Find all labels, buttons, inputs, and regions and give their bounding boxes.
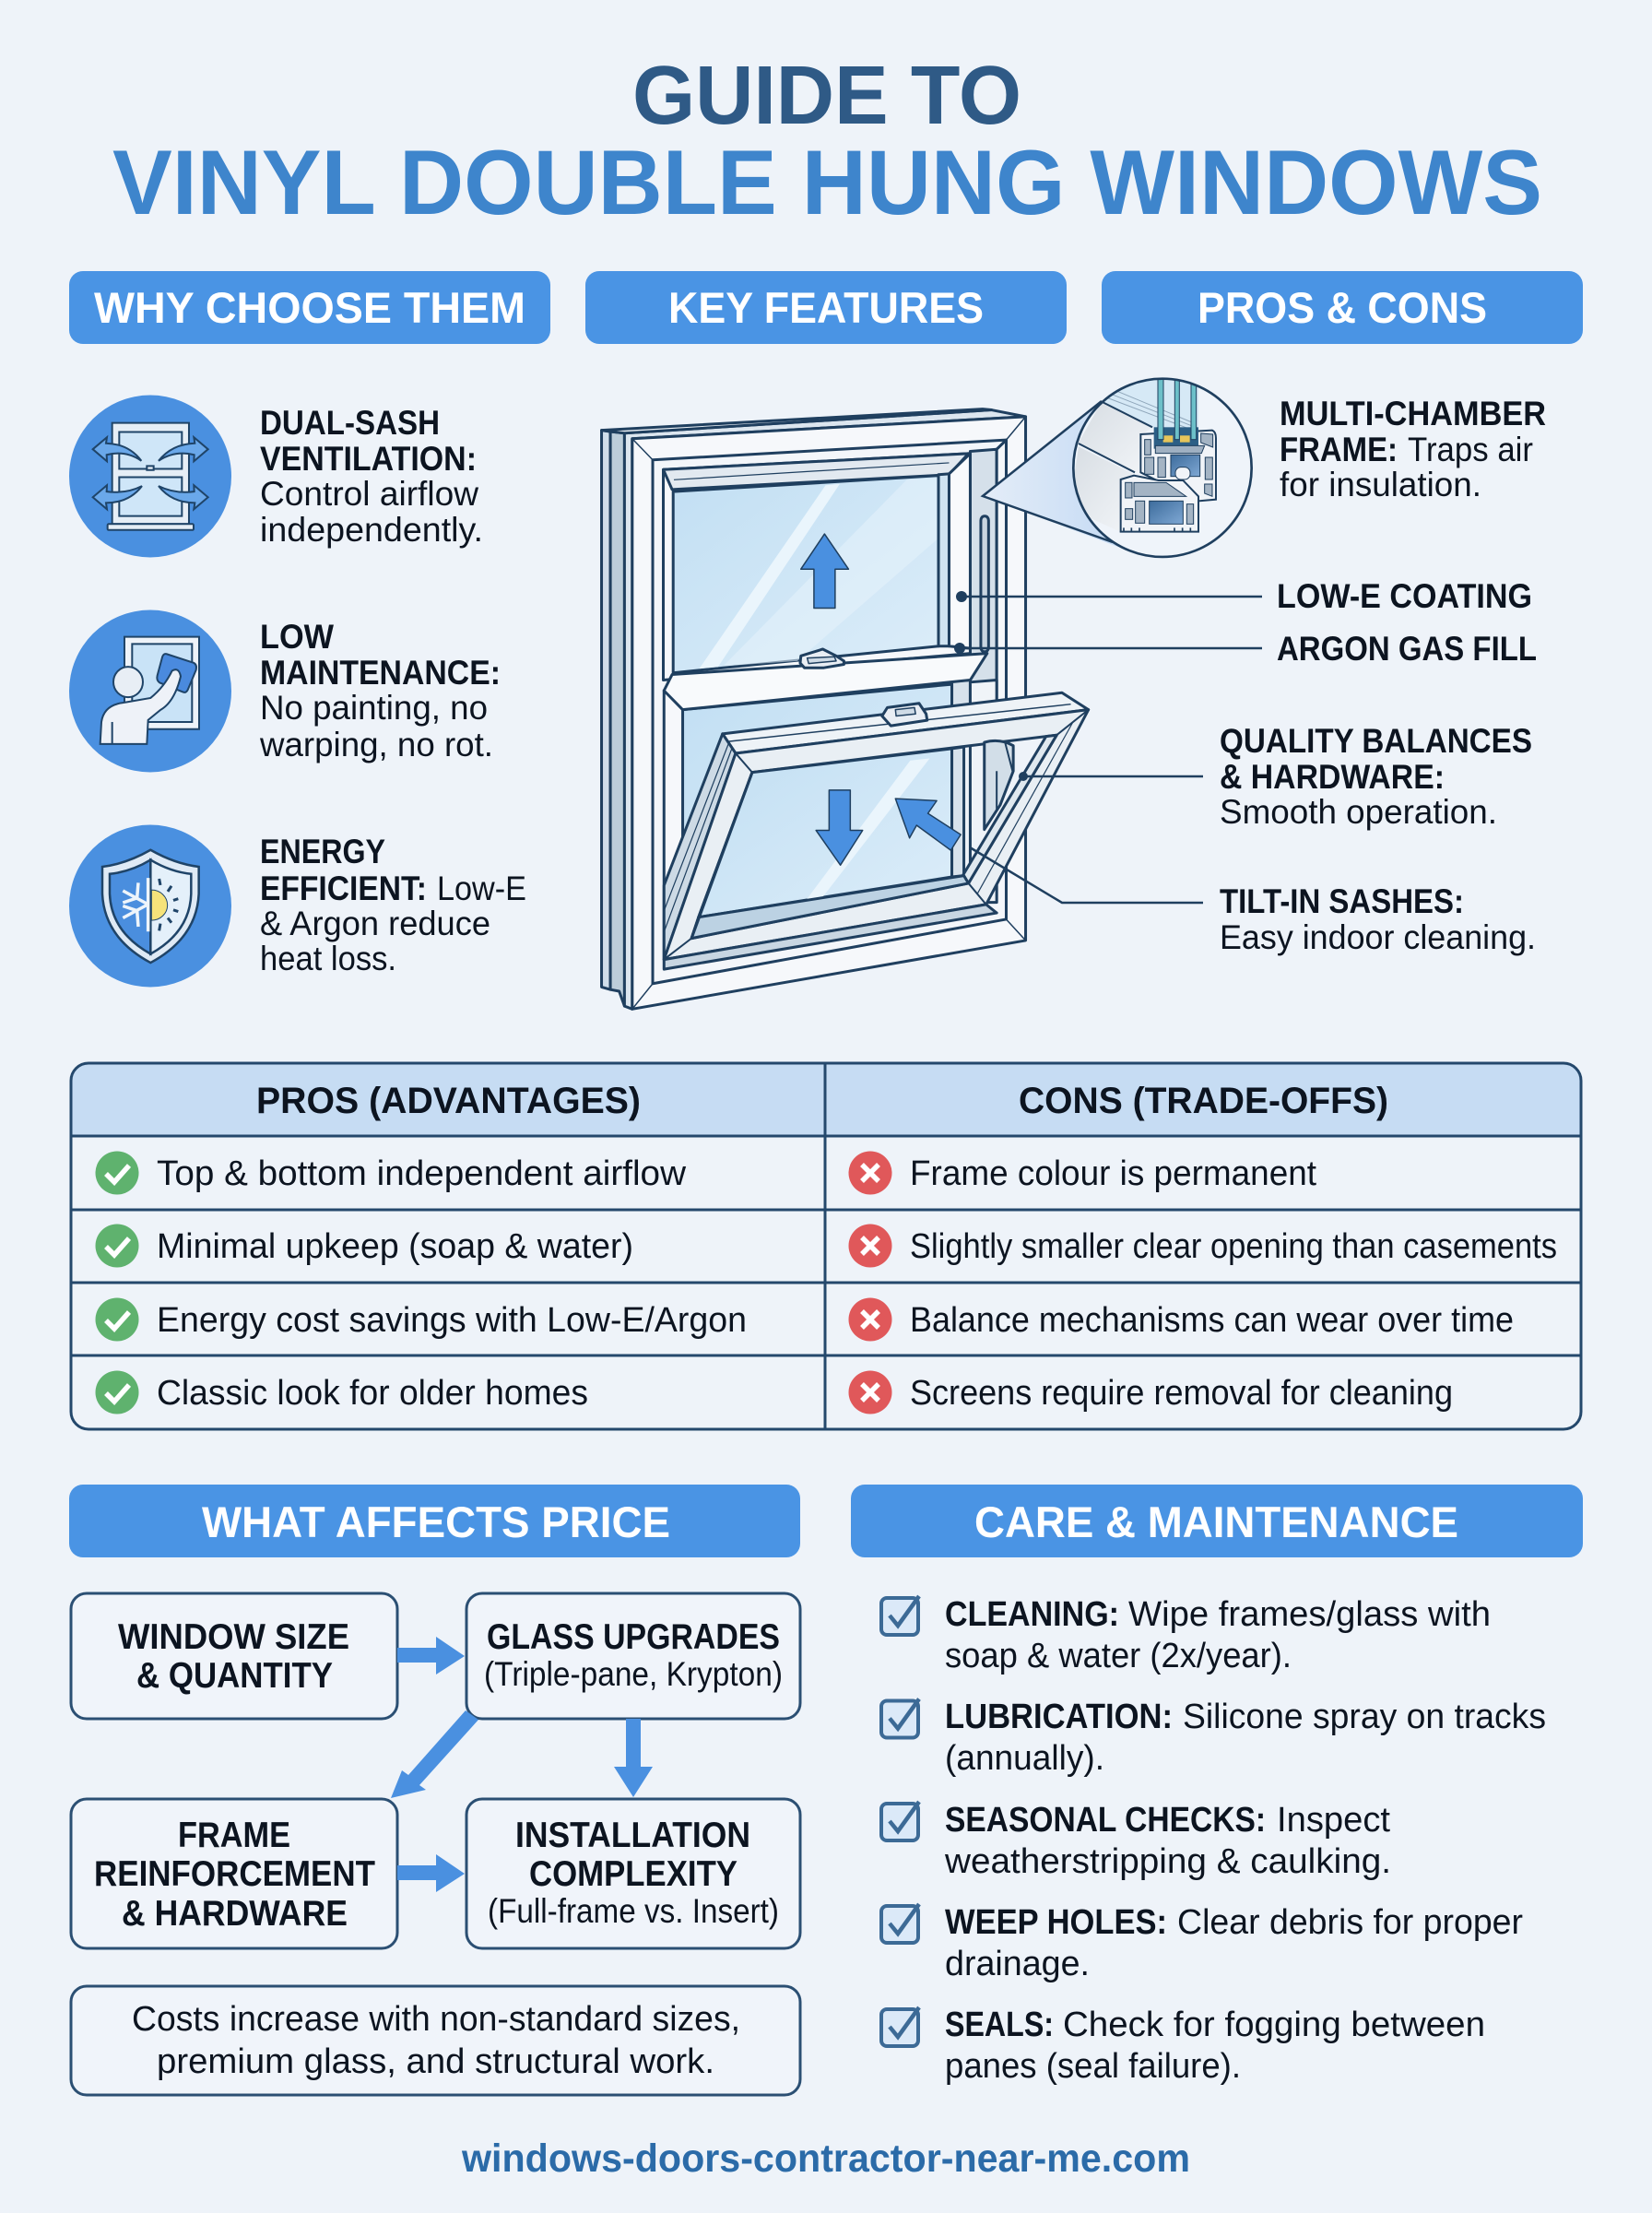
cons rows: Frame colour is permanent (910, 1154, 1316, 1193)
care item: lubrication: LUBRICATION: (945, 1698, 1173, 1736)
label: tilt-in sashes: TILT-IN SASHES: (1220, 882, 1464, 920)
callout: cost note (71, 1986, 800, 2095)
heading: what affects price: WHAT AFFECTS PRICE (202, 1497, 670, 1546)
care item: seasonal checks: SEASONAL CHECKS: (945, 1801, 1266, 1840)
label: multi-chamber frame: Traps air (1408, 431, 1533, 468)
label: quality balances and hardware: & HARDWARE: (1220, 758, 1445, 796)
table header: pros: PROS (ADVANTAGES) (256, 1081, 641, 1121)
cons rows: Slightly smaller clear opening than casements (910, 1227, 1557, 1266)
upper sash (664, 454, 970, 680)
cons rows (848, 1151, 1557, 1414)
pros rows: Top & bottom independent airflow (157, 1154, 687, 1193)
arrow: glass to frame (391, 1710, 478, 1798)
care item: seals: panes (seal failure). (945, 2047, 1241, 2086)
label: multi-chamber frame: FRAME: (1280, 431, 1398, 468)
box: frame reinforcement and hardware (71, 1799, 397, 1948)
care item: weep holes: drainage. (945, 1945, 1090, 1983)
text: energy efficient: & Argon reduce (260, 905, 490, 942)
text: energy efficient: heat loss. (260, 940, 396, 977)
label: tilt-in sashes: Easy indoor cleaning. (1220, 918, 1536, 956)
text: dual-sash ventilation: independently. (260, 511, 483, 549)
care item: lubrication (881, 1698, 1546, 1778)
callout: cost note: Costs increase with non-standard sizes, (132, 2000, 740, 2039)
heading: pros and cons (1102, 271, 1583, 344)
heading: care and maintenance: CARE & MAINTENANCE (974, 1497, 1458, 1546)
pros rows (96, 1151, 747, 1414)
care item: cleaning: CLEANING: (945, 1595, 1119, 1634)
window illustration (602, 409, 1089, 1009)
callout line: low-e coating (956, 591, 1262, 602)
icon: low maintenance (69, 610, 231, 773)
text: dual-sash ventilation: DUAL-SASH (260, 404, 440, 442)
title: GUIDE TO (632, 50, 1021, 142)
text: energy efficient: EFFICIENT: (260, 870, 427, 907)
care item: weep holes: WEEP HOLES: (945, 1903, 1167, 1942)
box: window size and quantity: WINDOW SIZE (118, 1617, 349, 1657)
text: energy efficient: Low-E (437, 870, 526, 907)
box: glass upgrades: (Triple-pane, Krypton) (484, 1655, 783, 1693)
upper sash lock (800, 649, 844, 668)
callout cone (983, 406, 1123, 549)
care item: seals: SEALS: (945, 2006, 1054, 2044)
arrow: sash down (816, 790, 863, 865)
footer website: windows-doors-contractor-near-me.com (461, 2136, 1190, 2181)
text: low maintenance (259, 618, 501, 763)
box: glass upgrades: GLASS UPGRADES (487, 1617, 780, 1657)
text: energy efficient (260, 833, 526, 977)
pros rows: Minimal upkeep (soap & water) (157, 1227, 633, 1266)
care item: cleaning (881, 1595, 1491, 1675)
arrow: sash up (801, 534, 848, 608)
care item: weep holes: Clear debris for proper (1177, 1903, 1523, 1942)
label: low-e coating: LOW-E COATING (1277, 577, 1532, 615)
care item: lubrication: (annually). (945, 1739, 1104, 1778)
heading: key features: KEY FEATURES (668, 283, 984, 332)
box: window size and quantity: & QUANTITY (136, 1656, 333, 1696)
pros rows: Energy cost savings with Low-E/Argon (157, 1301, 747, 1340)
label: quality balances and hardware: Smooth operation. (1220, 793, 1497, 831)
box: installation complexity: COMPLEXITY (529, 1854, 738, 1894)
cons rows: Screens require removal for cleaning (910, 1374, 1453, 1413)
window outer flanges (602, 409, 1026, 1009)
icon: energy efficient (69, 824, 231, 987)
label: tilt-in sashes (1220, 882, 1536, 956)
callout line: argon gas fill (954, 643, 1262, 654)
label: multi-chamber frame: MULTI-CHAMBER (1280, 395, 1546, 432)
heading: care and maintenance (851, 1485, 1583, 1557)
box: glass upgrades (466, 1593, 800, 1719)
callout line: balances and hardware (1019, 772, 1203, 781)
care item: weep holes (881, 1903, 1523, 1983)
box: frame reinforcement and hardware: FRAME (178, 1816, 290, 1855)
arrow: frame to installation (397, 1854, 465, 1892)
care item: cleaning: soap & water (2x/year). (945, 1637, 1292, 1675)
text: low maintenance: No painting, no (260, 689, 488, 727)
pros rows: Classic look for older homes (157, 1374, 588, 1413)
heading: why choose them: WHY CHOOSE THEM (94, 283, 525, 332)
arrow: tilt in (895, 799, 961, 850)
meeting rail (664, 654, 987, 710)
text: low maintenance: MAINTENANCE: (260, 654, 501, 692)
heading: pros and cons: PROS & CONS (1198, 283, 1487, 332)
box: installation complexity (466, 1799, 800, 1948)
box: frame reinforcement and hardware: & HARDWARE (122, 1894, 348, 1934)
care item: seals (881, 2006, 1485, 2086)
text: low maintenance: LOW (260, 618, 334, 656)
text: low maintenance: warping, no rot. (259, 726, 493, 763)
text: dual-sash ventilation: VENTILATION: (260, 440, 477, 478)
tilted sash lock (882, 704, 927, 726)
text: energy efficient: ENERGY (260, 833, 385, 870)
label: quality balances and hardware (1220, 722, 1532, 831)
title: VINYL DOUBLE HUNG WINDOWS (112, 131, 1542, 233)
panel: pros and cons table (71, 1063, 1581, 1429)
heading: key features (585, 271, 1067, 344)
care item: seals: Check for fogging between (1063, 2006, 1485, 2044)
arrow: size to glass (397, 1637, 465, 1675)
box: frame reinforcement and hardware: REINFORCEMENT (94, 1854, 375, 1894)
lower opening behind tilted sash (664, 680, 997, 960)
title (112, 50, 1542, 233)
magnifier: multi-chamber frame section (1069, 378, 1252, 557)
callout: cost note: premium glass, and structural work. (157, 2042, 714, 2081)
window main frame (632, 417, 1026, 1009)
icon: dual-sash ventilation (69, 395, 231, 557)
heading: why choose them (69, 271, 550, 344)
text: dual-sash ventilation (260, 404, 483, 549)
arrow: glass to installation (614, 1719, 653, 1797)
callout line: tilt-in sashes (970, 847, 1203, 903)
label: quality balances and hardware: QUALITY BALANCES (1220, 722, 1532, 760)
label: argon gas fill: ARGON GAS FILL (1277, 630, 1537, 668)
care item: seasonal checks: weatherstripping & caulking. (944, 1842, 1391, 1881)
table header: cons: CONS (TRADE-OFFS) (1019, 1081, 1388, 1121)
callout cone outline (983, 401, 1113, 542)
care item: seasonal checks (881, 1801, 1391, 1881)
cons rows: Balance mechanisms can wear over time (910, 1301, 1514, 1340)
box: installation complexity: INSTALLATION (515, 1816, 750, 1855)
care item: seasonal checks: Inspect (1277, 1801, 1390, 1840)
box: installation complexity: (Full-frame vs. Insert) (488, 1892, 779, 1930)
label: multi-chamber frame (1280, 395, 1546, 503)
box: window size and quantity (71, 1593, 397, 1719)
care item: cleaning: Wipe frames/glass with (1128, 1595, 1491, 1634)
heading: what affects price (69, 1485, 800, 1557)
tilted sash (664, 692, 1089, 969)
text: dual-sash ventilation: Control airflow (260, 475, 478, 513)
care item: lubrication: Silicone spray on tracks (1183, 1698, 1546, 1736)
label: multi-chamber frame: for insulation. (1280, 466, 1481, 503)
